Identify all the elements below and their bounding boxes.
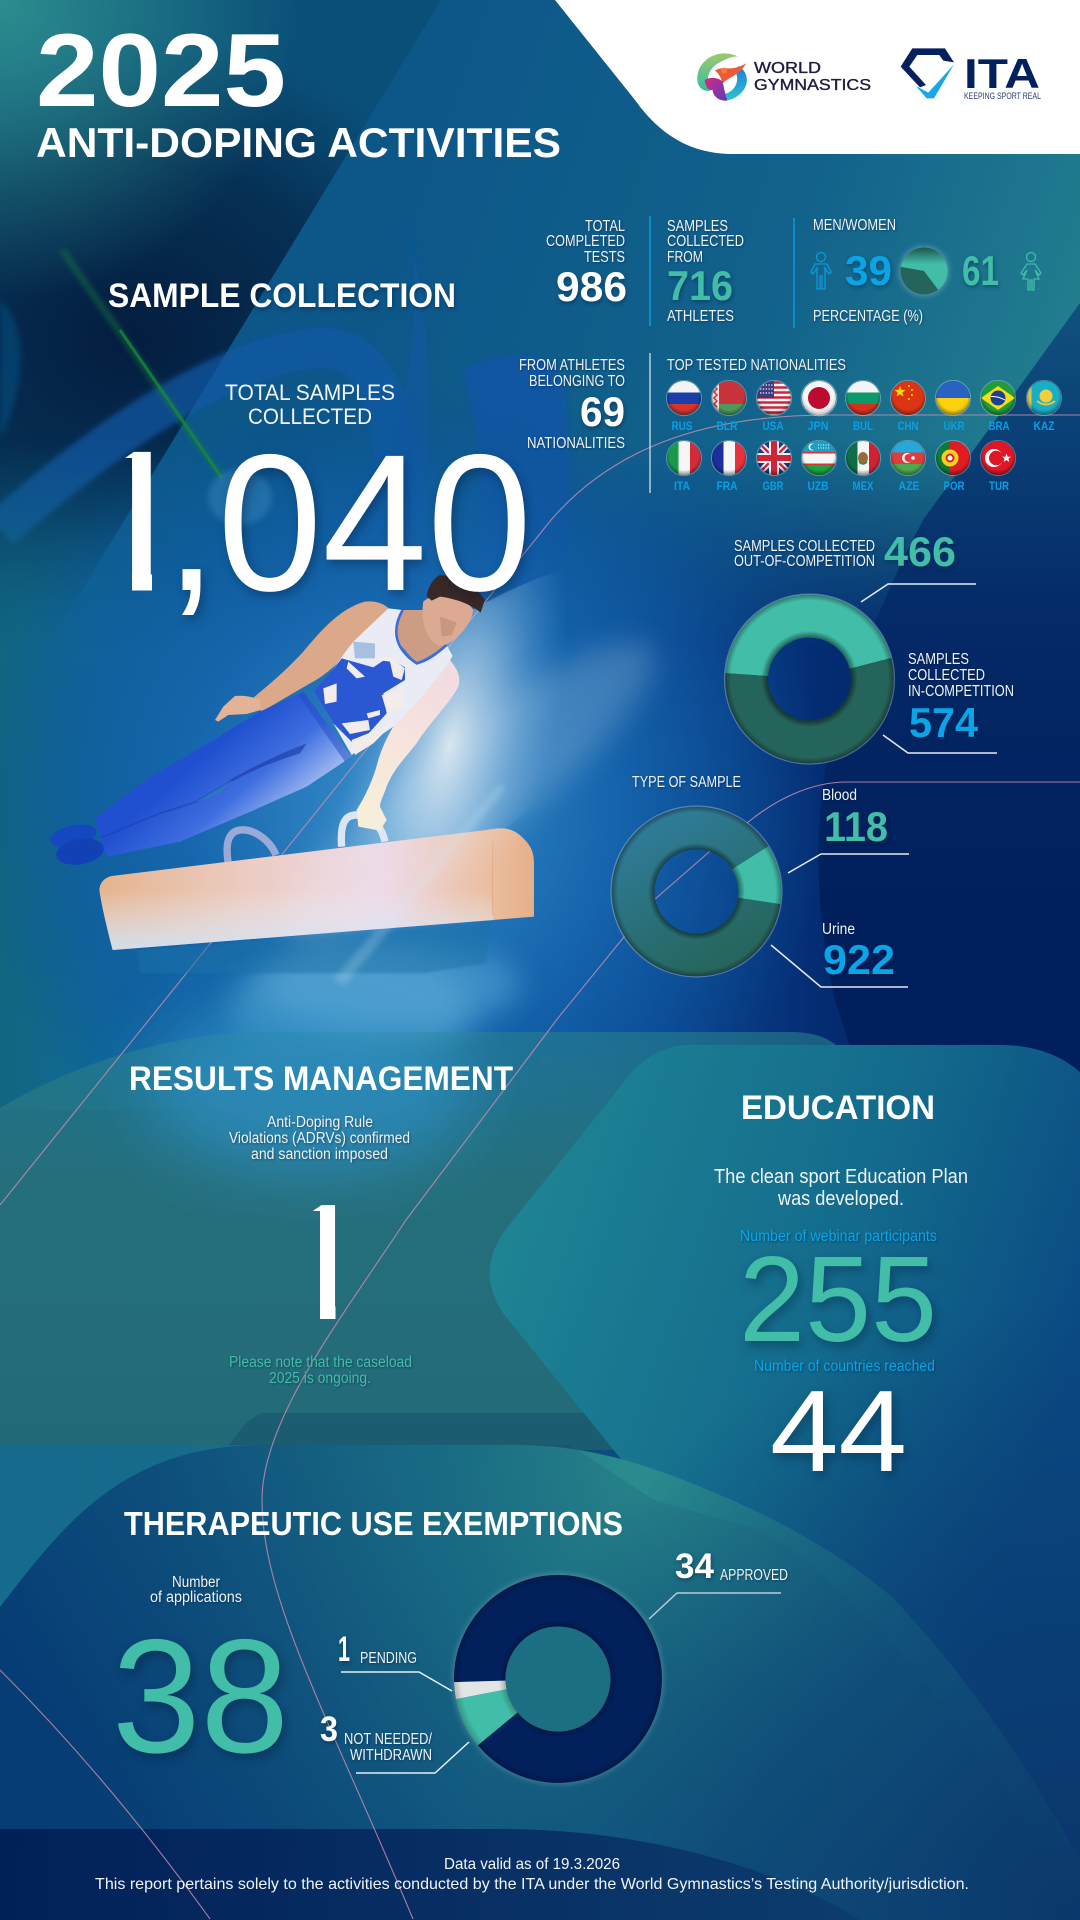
title: 2025 bbox=[36, 13, 286, 129]
logo wordmark bbox=[754, 60, 871, 94]
gymnast on pommel horse bbox=[48, 575, 534, 973]
title bbox=[36, 13, 561, 166]
flag: BRA bbox=[980, 380, 1016, 416]
panel: therapeutic use exemptions backdrop bbox=[0, 1445, 1080, 1920]
stat: total samples collected: ,040 bbox=[165, 414, 532, 632]
stat: men and women percentage bbox=[811, 217, 1041, 325]
callout: urine: Urine bbox=[822, 921, 855, 938]
flag: TUR bbox=[980, 440, 1016, 476]
panel: top tested nationalities: TOP TESTED NATIONALITIES bbox=[667, 357, 846, 374]
panel: education bbox=[490, 1045, 1080, 1920]
description bbox=[229, 1114, 410, 1163]
flag: CHN bbox=[890, 380, 926, 416]
panel: education content bbox=[714, 1089, 968, 1496]
flag: KAZ bbox=[1026, 380, 1062, 416]
callout: out of competition: 466 bbox=[884, 528, 956, 575]
donut chart: type of sample bbox=[611, 806, 782, 977]
stat: men and women percentage: 61 bbox=[962, 247, 999, 294]
glow under pommel horse bbox=[260, 940, 520, 1030]
stat: total completed tests: 986 bbox=[556, 263, 627, 310]
footer note: Data valid as of 19.3.2026 bbox=[444, 1856, 620, 1873]
stat: total samples collected: COLLECTED bbox=[248, 404, 372, 429]
description: and sanction imposed bbox=[251, 1146, 388, 1163]
flag labels row 1: BRA bbox=[988, 419, 1010, 433]
stat: nationalities: FROM ATHLETES bbox=[519, 357, 625, 374]
logo: ITA: ITA bbox=[964, 50, 1040, 97]
flag labels row 2: AZE bbox=[898, 479, 920, 493]
callout: not needed or withdrawn: 3 bbox=[320, 1710, 338, 1749]
stat: men and women percentage: PERCENTAGE (%) bbox=[813, 308, 923, 325]
flag labels row 2: MEX bbox=[852, 479, 874, 493]
flag labels row 2: UZB bbox=[808, 479, 829, 493]
flag labels row 1: CHN bbox=[898, 419, 918, 433]
label: number of applications: Number bbox=[172, 1574, 220, 1591]
flag labels row 2: POR bbox=[944, 479, 965, 493]
big number: 255: 255 bbox=[739, 1231, 937, 1367]
heading: THERAPEUTIC USE EXEMPTIONS bbox=[124, 1505, 623, 1542]
logo: World Gymnastics bbox=[697, 53, 871, 101]
callout: out of competition bbox=[734, 528, 976, 602]
flag: POR bbox=[935, 440, 971, 476]
note bbox=[229, 1354, 412, 1387]
stat: total samples collected: TOTAL SAMPLES bbox=[225, 380, 395, 405]
logo wordmark: WORLD bbox=[754, 60, 821, 77]
logo: ITA: KEEPING SPORT REAL bbox=[964, 91, 1041, 102]
footer note: This report pertains solely to the activities conducted by the ITA under the World Gymnastics’s Testing Authority/jurisdiction. bbox=[95, 1876, 969, 1893]
callout: blood: 118 bbox=[824, 803, 888, 850]
flag: GBR bbox=[756, 440, 792, 476]
callout: in competition: SAMPLES bbox=[908, 651, 969, 668]
flag: UKR bbox=[935, 380, 971, 416]
callout: in competition: COLLECTED bbox=[908, 667, 985, 684]
big number: 1 bbox=[279, 1170, 370, 1354]
flag: UZB bbox=[801, 440, 837, 476]
pommel horse shadow bbox=[137, 923, 490, 973]
callout: urine bbox=[771, 921, 908, 987]
flag: ITA bbox=[666, 440, 702, 476]
flag labels row 2: GBR bbox=[762, 479, 784, 493]
label: type of sample: TYPE OF SAMPLE bbox=[632, 774, 741, 791]
label: webinar participants: Number of webinar participants bbox=[740, 1228, 937, 1245]
flag labels row 2: ITA bbox=[674, 479, 690, 493]
glow behind gymnast bbox=[176, 500, 724, 990]
callout: out of competition: OUT-OF-COMPETITION bbox=[734, 553, 875, 570]
stat: samples collected from athletes: 716 bbox=[667, 262, 733, 309]
light ray bbox=[333, 785, 507, 985]
flag labels row 1: UKR bbox=[944, 419, 965, 433]
flag labels row 1: BUL bbox=[853, 419, 873, 433]
flag labels row 1 bbox=[672, 419, 1054, 433]
blue glow on results panel bbox=[145, 995, 475, 1175]
stat: samples collected from athletes: SAMPLES bbox=[667, 218, 728, 235]
ribbon shapes bbox=[0, 260, 570, 544]
panel: results management bbox=[129, 1060, 513, 1387]
title: ANTI-DOPING ACTIVITIES bbox=[36, 119, 561, 166]
stat: samples collected from athletes: ATHLETES bbox=[667, 308, 734, 325]
flag labels row 1: KAZ bbox=[1034, 419, 1054, 433]
stat: men and women percentage: 39 bbox=[845, 247, 892, 294]
background bbox=[0, 0, 1080, 1108]
flag: BUL bbox=[845, 380, 881, 416]
neck and head bbox=[393, 610, 447, 663]
stat: total samples collected: 1 bbox=[82, 410, 194, 633]
callout: pending: PENDING bbox=[360, 1650, 417, 1667]
callout: approved: 34 bbox=[675, 1547, 715, 1586]
stat: total completed tests: TOTAL bbox=[585, 218, 625, 235]
flag: USA bbox=[756, 380, 792, 416]
flag labels row 1: RUS bbox=[672, 419, 692, 433]
callout: blood: Blood bbox=[822, 787, 857, 804]
blurred hand shape bbox=[208, 469, 272, 525]
footer note bbox=[95, 1856, 969, 1893]
stat: samples collected from athletes bbox=[667, 218, 744, 325]
callout: approved: APPROVED bbox=[720, 1567, 788, 1584]
flag labels row 1: JPN bbox=[808, 419, 828, 433]
glow overlay bbox=[255, 605, 685, 975]
description: Anti-Doping Rule bbox=[267, 1114, 373, 1131]
callout: approved bbox=[649, 1547, 788, 1619]
description: Violations (ADRVs) confirmed bbox=[229, 1130, 410, 1147]
big number: 44: 44 bbox=[770, 1366, 907, 1496]
flag: MEX bbox=[845, 440, 881, 476]
right arm bbox=[357, 657, 459, 831]
callout: not needed or withdrawn: WITHDRAWN bbox=[350, 1747, 432, 1764]
stat: nationalities: NATIONALITIES bbox=[527, 435, 625, 452]
callout: in competition: 574 bbox=[909, 699, 979, 746]
left arm bbox=[253, 601, 390, 712]
pants bbox=[95, 692, 352, 857]
flag: FRA bbox=[711, 440, 747, 476]
callout: in competition bbox=[883, 651, 1014, 753]
icon: man bbox=[811, 252, 831, 289]
donut chart: in and out of competition bbox=[724, 594, 894, 764]
callout: not needed or withdrawn: NOT NEEDED/ bbox=[344, 1731, 433, 1748]
note: Please note that the caseload bbox=[229, 1354, 412, 1371]
callout: pending bbox=[338, 1630, 452, 1691]
callout: not needed or withdrawn bbox=[320, 1710, 469, 1773]
flag: AZE bbox=[890, 440, 926, 476]
callout: urine: 922 bbox=[823, 936, 895, 983]
stat: nationalities: BELONGING TO bbox=[529, 373, 625, 390]
flag labels row 2: TUR bbox=[989, 479, 1009, 493]
pommel horse bbox=[99, 815, 534, 950]
heading: sample collection: SAMPLE COLLECTION bbox=[108, 277, 456, 315]
gymnast figure bbox=[48, 575, 485, 868]
flag labels row 1: USA bbox=[762, 419, 784, 433]
heading: RESULTS MANAGEMENT bbox=[129, 1060, 513, 1098]
callout: in competition: IN-COMPETITION bbox=[908, 683, 1014, 700]
stat: samples collected from athletes: FROM bbox=[667, 249, 703, 266]
stat: nationalities bbox=[519, 357, 625, 452]
stat: nationalities: 69 bbox=[580, 388, 625, 435]
callout: pending: 1 bbox=[338, 1630, 350, 1669]
label: number of applications bbox=[150, 1574, 242, 1606]
callout: blood bbox=[788, 787, 909, 873]
panel: dark upper band of exemptions backdrop bbox=[220, 1413, 720, 1460]
label: number of applications: of applications bbox=[150, 1589, 242, 1606]
stat: total completed tests bbox=[546, 218, 627, 310]
green streak bbox=[62, 250, 222, 478]
logo: ITA bbox=[901, 48, 1041, 102]
flag labels row 2: FRA bbox=[716, 479, 738, 493]
logo panel white corner bbox=[555, 0, 1080, 154]
panel: therapeutic use exemptions bbox=[112, 1505, 788, 1787]
singlet bbox=[313, 608, 453, 755]
stat: total completed tests: COMPLETED bbox=[546, 233, 625, 250]
feet bbox=[48, 821, 98, 851]
hair bbox=[427, 575, 485, 613]
stat: men and women percentage: MEN/WOMEN bbox=[813, 217, 896, 234]
flag labels row 2 bbox=[674, 479, 1009, 493]
stat: total completed tests: TESTS bbox=[584, 249, 625, 266]
flag: BLR bbox=[711, 380, 747, 416]
flag: JPN bbox=[801, 380, 837, 416]
description bbox=[714, 1166, 968, 1210]
donut chart: TUE outcomes bbox=[453, 1574, 663, 1784]
logo wordmark: GYMNASTICS bbox=[754, 77, 871, 94]
flag labels row 1: BLR bbox=[716, 419, 738, 433]
description: was developed. bbox=[777, 1188, 904, 1210]
flag: RUS bbox=[666, 380, 702, 416]
note: 2025 is ongoing. bbox=[269, 1370, 371, 1387]
icon: woman bbox=[1021, 252, 1041, 290]
description: The clean sport Education Plan bbox=[714, 1166, 968, 1188]
stat: samples collected from athletes: COLLECTED bbox=[667, 233, 744, 250]
callout: out of competition: SAMPLES COLLECTED bbox=[734, 538, 875, 555]
panel: results management backdrop bbox=[0, 1032, 850, 1450]
decorative pink lines bbox=[0, 415, 1080, 1919]
pie chart: men women bbox=[900, 246, 948, 296]
panel: top tested nationalities bbox=[666, 357, 1062, 493]
hand bbox=[215, 696, 261, 722]
panel: footer band bbox=[0, 1829, 860, 1920]
big number: 38: 38 bbox=[112, 1606, 289, 1787]
heading: EDUCATION bbox=[741, 1089, 935, 1127]
label: countries reached: Number of countries reached bbox=[754, 1358, 935, 1375]
